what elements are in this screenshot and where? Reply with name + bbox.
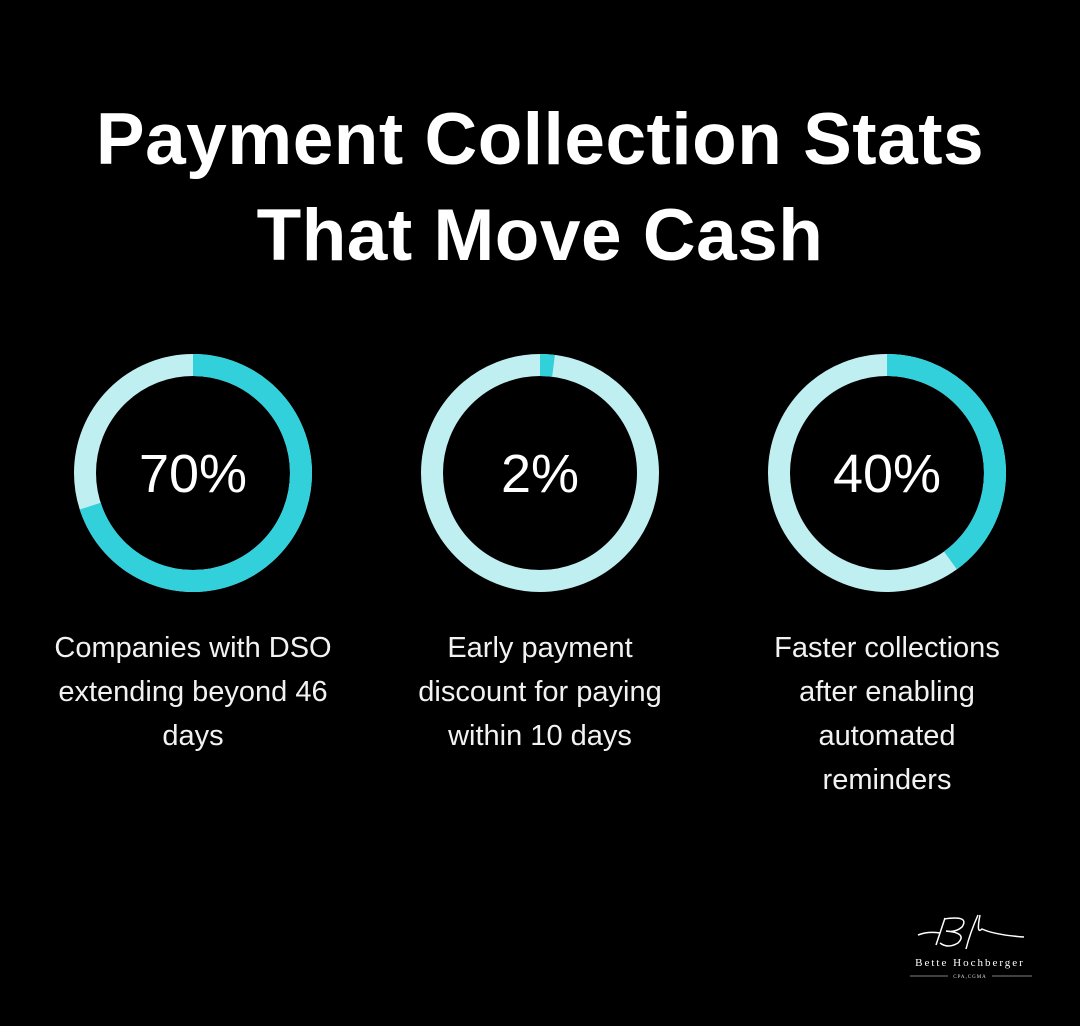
label: 2%: Early payment bbox=[447, 632, 633, 664]
ring: 2%: 2% bbox=[501, 444, 579, 504]
logo bbox=[910, 914, 1032, 980]
label: 70%: Companies with DSO extending beyond 46 days bbox=[54, 632, 332, 752]
ring: 70%: 70% bbox=[139, 444, 247, 504]
ring: 40%: 40% bbox=[833, 444, 941, 504]
label: 2% bbox=[418, 632, 662, 752]
logo: CPA,CGMA bbox=[953, 975, 987, 980]
label: 2%: discount for paying within 10 days bbox=[418, 676, 662, 752]
title: That Move Cash bbox=[257, 195, 823, 276]
label: 40%: Faster collections after enabling automated reminders bbox=[774, 632, 1000, 796]
ring: 2% bbox=[421, 354, 659, 592]
logo: Bette Hochberger bbox=[915, 957, 1025, 969]
ring: 70% bbox=[74, 354, 312, 592]
ring: 40% bbox=[768, 354, 1006, 592]
title: Payment Collection Stats bbox=[96, 99, 984, 180]
title bbox=[96, 99, 984, 276]
